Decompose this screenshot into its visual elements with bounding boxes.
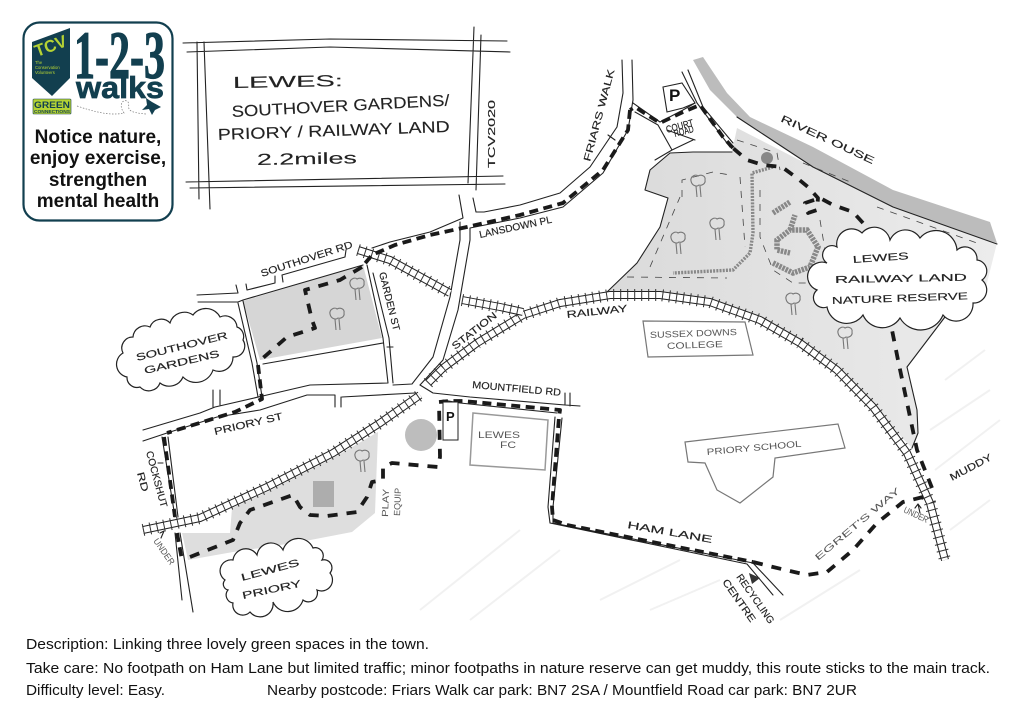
logo: 1-2-3 walks: walks xyxy=(75,70,164,105)
logo card xyxy=(24,17,172,220)
description text: Difficulty level: Easy. xyxy=(26,683,165,699)
road network xyxy=(143,60,783,612)
callout: southover gardens xyxy=(117,309,245,391)
walking route xyxy=(164,105,932,575)
panel: railway land nature reserve shading xyxy=(607,128,997,448)
callout: lewes railway land nature reserve: NATURE RESERVE xyxy=(832,291,969,307)
buildings xyxy=(470,321,845,503)
map labels: STATION xyxy=(450,310,499,352)
icons: reserve trees xyxy=(671,175,852,349)
railway lines xyxy=(143,250,945,560)
map labels: PLAY xyxy=(380,489,391,517)
map labels: PRIORY SCHOOL xyxy=(706,439,802,457)
card tagline: Notice nature, xyxy=(35,127,161,148)
panel: southover gardens shading xyxy=(243,265,382,360)
map labels: EGRET'S WAY xyxy=(813,485,902,563)
map labels: LANSDOWN PL xyxy=(478,215,553,241)
logo: green connections xyxy=(33,99,71,114)
icon: TCV map marker xyxy=(32,28,70,96)
river ouse xyxy=(693,57,997,244)
callout: lewes railway land nature reserve: LEWES xyxy=(852,251,910,266)
title box: PRIORY / RAILWAY LAND xyxy=(218,119,450,144)
map labels: ROAD xyxy=(673,124,695,140)
card tagline: enjoy exercise, xyxy=(30,148,166,169)
map labels: GARDEN ST xyxy=(376,271,401,332)
map labels: COLLEGE xyxy=(667,339,723,351)
card tagline: mental health xyxy=(37,191,159,212)
callout: lewes priory: LEWES xyxy=(240,558,301,584)
logo: 1-2-3 walks xyxy=(74,17,165,105)
icon: TCV map marker: Conservation xyxy=(35,65,60,70)
icon: TCV map marker: TCV xyxy=(32,31,70,61)
map labels: RIVER OUSE xyxy=(779,114,876,167)
car parks: P xyxy=(669,86,680,105)
map labels: SOUTHOVER RD xyxy=(260,240,354,280)
logo: green connections: CONNECTIONS xyxy=(34,109,70,114)
callout: lewes priory: PRIORY xyxy=(241,579,303,602)
card tagline xyxy=(30,127,166,212)
priory ruin and mound xyxy=(313,419,437,507)
map labels: COCKSHUT xyxy=(143,450,169,509)
description text: Take care: No footpath on Ham Lane but limited traffic; minor footpaths in nature reserve can get muddy, this route sticks to the main track. xyxy=(26,661,990,677)
description text xyxy=(26,637,990,699)
map labels: LEWES xyxy=(478,430,520,440)
callout: southover gardens: SOUTHOVER xyxy=(135,330,229,364)
callout: lewes railway land nature reserve xyxy=(808,227,987,330)
title box: LEWES: xyxy=(233,73,343,92)
panel: lewes priory shading xyxy=(182,432,378,560)
logo: green connections: GREEN xyxy=(34,100,70,111)
map labels: CENTRE xyxy=(720,577,757,625)
map labels: RAILWAY xyxy=(566,304,628,321)
map labels xyxy=(134,68,994,626)
map labels: FC xyxy=(500,440,517,450)
car parks: P xyxy=(446,409,455,424)
logo: 1-2-3 walks: 1-2-3 xyxy=(74,17,165,93)
icon: butterfly with dotted flight path xyxy=(77,98,161,115)
map labels: MOUNTFIELD RD xyxy=(472,380,561,399)
map labels: RECYCLING xyxy=(734,572,776,626)
title box: TCV2020 xyxy=(487,99,498,168)
description text: Nearby postcode: Friars Walk car park: BN7 2SA / Mountfield Road car park: BN7 2UR xyxy=(267,683,857,699)
card tagline: strengthen xyxy=(49,170,147,191)
callout: lewes priory xyxy=(220,538,332,617)
icons: park trees xyxy=(330,278,369,472)
map labels: HAM LANE xyxy=(626,520,714,546)
icon: TCV map marker: Volunteers xyxy=(35,70,55,75)
map labels: SUSSEX DOWNS xyxy=(650,327,737,340)
car parks xyxy=(443,83,695,440)
map labels: MUDDY xyxy=(948,452,994,484)
title box: 2.2miles xyxy=(257,150,357,169)
title box xyxy=(183,27,510,209)
map labels: UNDER xyxy=(151,536,177,567)
callout: southover gardens: GARDENS xyxy=(143,349,221,377)
reserve outline and trails xyxy=(607,140,977,448)
icon: TCV map marker: The xyxy=(35,60,43,65)
map labels: FRIARS WALK xyxy=(582,68,618,163)
map labels: RD xyxy=(134,471,150,493)
map labels: EQUIP xyxy=(392,488,403,516)
title box: SOUTHOVER GARDENS/ xyxy=(231,93,451,121)
description text: Description: Linking three lovely green spaces in the town. xyxy=(26,637,429,653)
map labels: UNDER xyxy=(902,505,930,525)
callout: lewes railway land nature reserve: RAILWAY LAND xyxy=(835,273,967,286)
map labels: COURT xyxy=(665,118,695,136)
map labels: PRIORY ST xyxy=(213,411,284,438)
